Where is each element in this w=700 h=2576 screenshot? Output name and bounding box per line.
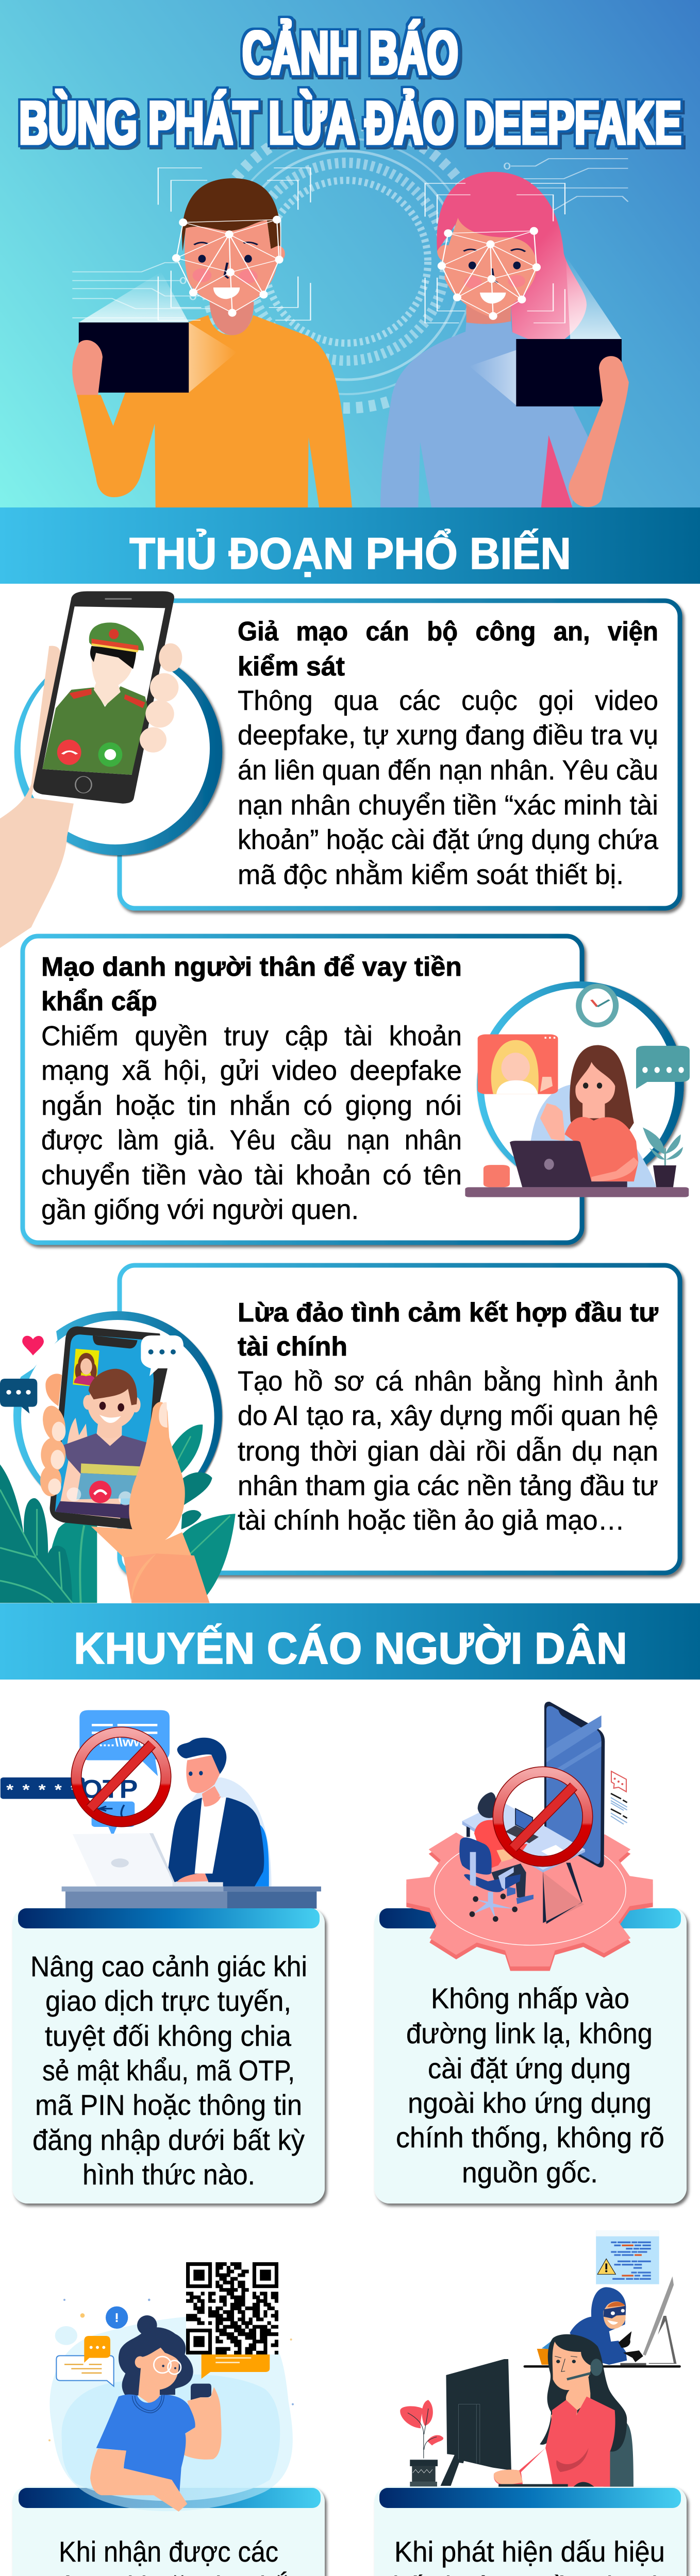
card text: Khi phát hiện dấu hiệu — [394, 2535, 665, 2568]
OTP office illustration: ....\\www — [99, 1735, 156, 1749]
man — [77, 178, 352, 507]
support agent and hacker illustration — [400, 2231, 681, 2487]
card text: Khi nhận được các — [59, 2535, 278, 2568]
panel text: khẩn cấp — [41, 987, 157, 1016]
card 3: khi nhận được cuộc gọi — [12, 2262, 325, 2576]
panel text — [238, 1298, 658, 1536]
OTP office illustration: OTP — [81, 1774, 138, 1803]
prohibition sign — [76, 1732, 166, 1822]
OTP office illustration: ***** — [6, 1781, 78, 1798]
gradient bar — [18, 1908, 320, 1928]
card text — [30, 1950, 307, 2191]
monitor and plant — [400, 2359, 557, 2486]
card body — [374, 2486, 687, 2576]
card text: giao dịch trực tuyến, — [45, 1985, 291, 2017]
ring with video call illustration — [465, 981, 690, 1197]
woman — [380, 172, 588, 507]
hacker — [524, 2276, 681, 2368]
man scan brackets — [158, 168, 310, 320]
header background — [0, 0, 700, 507]
panel text: mạng xã hội, gửi video deepfake — [41, 1055, 462, 1086]
card 2: không nhấp vào link lạ — [374, 1702, 687, 2204]
title — [19, 19, 681, 157]
panel: giả mạo cán bộ — [0, 591, 680, 948]
card body — [12, 2486, 325, 2576]
card text — [396, 1982, 664, 2189]
gradient bar — [19, 2488, 321, 2508]
title: CẢNH BÁO — [242, 19, 458, 87]
panel text: chuyển tiền vào tài khoản có tên — [41, 1160, 462, 1191]
panel text: ngắn hoặc tin nhắn có giọng nói — [41, 1090, 462, 1121]
man face mesh — [172, 216, 284, 317]
isometric gear, phone and worker illustration — [406, 1702, 653, 1971]
man tablet with beam — [72, 272, 237, 395]
section banner: khuyến cáo người dân: KHUYẾN CÁO NGƯỜI DÂN — [74, 1624, 627, 1673]
panel text: trong thời gian dài rồi dẫn dụ nạn — [238, 1436, 658, 1467]
woman tablet with beam — [469, 256, 629, 507]
ring with police phone illustration — [0, 591, 222, 948]
panel text — [238, 617, 659, 890]
illustration: man and woman with face scan — [72, 159, 629, 507]
circuit lines — [72, 159, 628, 318]
panel text: tài chính hoặc tiền ảo giả mạo… — [238, 1505, 625, 1536]
card text: đăng nhập dưới bất kỳ — [32, 2124, 305, 2156]
card 1: nâng cao cảnh giác — [1, 1710, 325, 2204]
panel frame — [23, 936, 582, 1243]
panel text: gần giống với người quen. — [41, 1194, 359, 1225]
section banner: khuyến cáo người dân — [0, 1603, 700, 1680]
card body — [374, 1908, 687, 2204]
panel text: nhân tham gia các nền tảng đầu tư — [238, 1470, 658, 1501]
card text: nguồn gốc. — [462, 2156, 598, 2189]
panel text: nạn nhân chuyển tiền “xác minh tài — [238, 790, 658, 821]
panel text: được làm giả. Yêu cầu nạn nhân — [41, 1125, 462, 1156]
card text: đường link lạ, không — [406, 2017, 653, 2049]
card text: chính thống, không rõ — [396, 2121, 664, 2154]
panel text: do AI tạo ra, xây dựng mối quan hệ — [238, 1400, 658, 1431]
panel text: khoản” hoặc cài đặt ứng dụng chứa — [238, 824, 659, 855]
panel: mạo danh người thân — [23, 936, 690, 1243]
woman face mesh — [438, 227, 541, 320]
card body — [12, 1908, 325, 2204]
card 4: khi phát hiện dấu hiệu — [374, 2231, 687, 2576]
panel: lừa đảo tình cảm — [0, 1265, 680, 1603]
panel text: Tạo hồ sơ cá nhân bằng hình ảnh — [238, 1366, 658, 1397]
panel frame — [120, 601, 680, 908]
gradient bar — [379, 1908, 681, 1928]
panel text: án liên quan đến nạn nhân. Yêu cầu — [238, 755, 658, 786]
panel text — [41, 952, 462, 1225]
woman scan brackets — [425, 183, 565, 323]
panel text: deepfake, tự xưng đang điều tra vụ — [238, 720, 658, 751]
card text: Nâng cao cảnh giác khi — [30, 1950, 307, 1982]
panel text: Thông qua các cuộc gọi video — [238, 685, 658, 716]
panel text: Chiếm quyền truy cập tài khoản — [41, 1021, 462, 1052]
panel text: Giả mạo cán bộ công an, viện — [238, 617, 658, 647]
warning screen — [596, 2231, 659, 2284]
section banner: thủ đoạn phổ biến: THỦ ĐOẠN PHỔ BIẾN — [129, 529, 571, 579]
card text: mã PIN hoặc thông tin — [35, 2089, 302, 2121]
card text: cài đặt ứng dụng — [428, 2052, 631, 2084]
ring with dating phone illustration — [0, 1311, 236, 1603]
panel text: mã độc nhằm kiểm soát thiết bị. — [238, 859, 624, 890]
panel text: Mạo danh người thân để vay tiền — [41, 952, 462, 982]
card text: tuyệt đối không chia — [45, 2020, 292, 2052]
OTP office illustration — [1, 1710, 321, 1909]
card text: hình thức nào. — [82, 2158, 255, 2191]
panel text: kiểm sát — [238, 652, 345, 682]
panel frame — [120, 1265, 680, 1573]
prohibition sign — [498, 1772, 588, 1861]
QR code — [186, 2262, 278, 2354]
panel text: Lừa đảo tình cảm kết hợp đầu tư — [238, 1298, 658, 1328]
decorative tech rings — [205, 125, 488, 408]
panel text: tài chính — [238, 1332, 347, 1362]
card text: ngoài kho ứng dụng — [408, 2087, 652, 2119]
gradient bar — [379, 2488, 681, 2508]
card text: sẻ mật khẩu, mã OTP, — [42, 2054, 295, 2087]
headset agent — [494, 2334, 634, 2487]
section banner: thủ đoạn phổ biến — [0, 507, 700, 584]
card text: Không nhấp vào — [431, 1982, 629, 2014]
woman with phone illustration — [48, 2299, 294, 2512]
